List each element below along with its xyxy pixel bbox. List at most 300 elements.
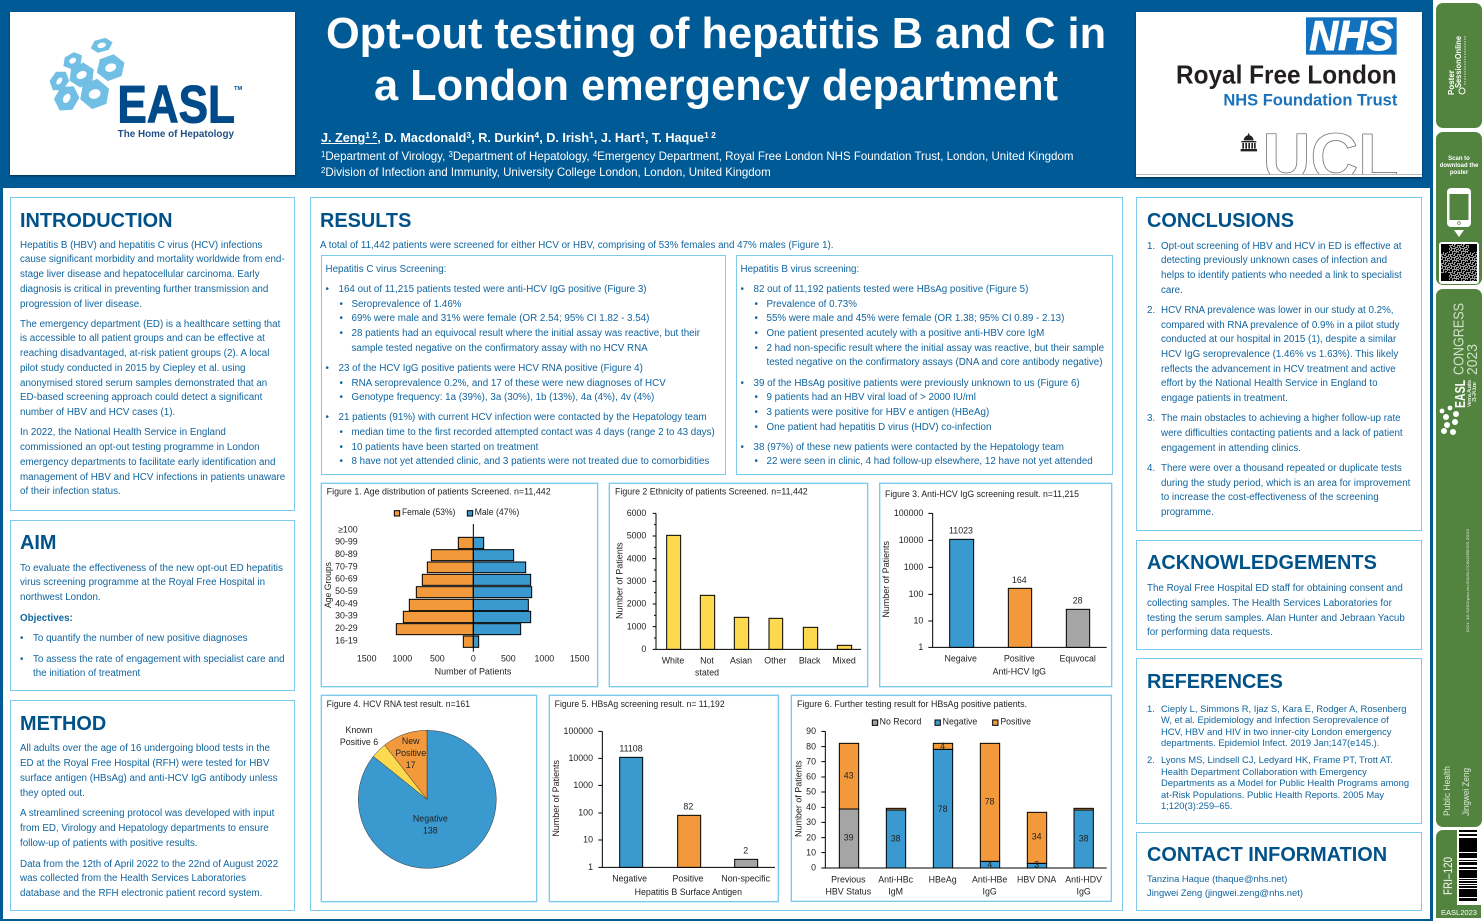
text: method paragraph 2: follow-up of patients with positive results. — [20, 838, 198, 849]
figure 2 bars — [667, 535, 852, 649]
figure 1 age labels: 40-49 — [335, 599, 358, 609]
conclusion 1: detecting previously unknown cases of infection and — [1161, 255, 1387, 266]
affiliations — [321, 150, 1073, 179]
figure 1 age labels: 16-19 — [335, 636, 358, 646]
block: EASL Congress 2023 — [1436, 289, 1482, 827]
text: introduction paragraph 3: In 2022, the National Health Service in England — [20, 427, 226, 438]
logo: EASL — [10, 12, 295, 175]
figure 3 value labels: 164 — [1012, 575, 1027, 585]
figure 4 pie slices — [358, 730, 496, 868]
logo: EASL: The Home of Hepatology — [118, 129, 234, 140]
text: aim statement: virus screening programme at the Royal Free Hospital in — [20, 577, 265, 588]
text: acknowledgements: for performing data requests. — [1147, 627, 1273, 638]
list: HCV RNA results: 23 of the HCV IgG positive patients were HCV RNA positive (Figure 4) — [338, 363, 643, 374]
text: introduction paragraph 1 — [20, 240, 285, 310]
figure 6 tick labels: 90 — [806, 726, 816, 736]
figure 2 tick labels: 6000 — [627, 508, 646, 518]
conclusion 2: HCV RNA prevalence was lower in our study at 0.2%, — [1161, 305, 1394, 316]
figure 3 value labels: 28 — [1073, 596, 1083, 606]
list: HBsAg results: 55% were male and 45% were female (OR 1.38; 95% CI 0.89 - 2.13) — [766, 313, 1064, 324]
figure 2 tick labels: 1000 — [627, 621, 646, 631]
figure 6 tick labels: 0 — [811, 863, 816, 873]
text: results summary: A total of 11,442 patients were screened for either HCV or HBV, comprising of 53% females and 47% males (Figure 1). — [320, 240, 834, 251]
logo: NHS Royal Free London and UCL — [1136, 12, 1422, 177]
figure 1 legend — [394, 507, 519, 517]
figure 1 age labels: 60-69 — [335, 574, 358, 584]
figure 4 slice labels: New — [402, 736, 420, 746]
text: introduction paragraph 3: emergency departments to facilitate early identification and — [20, 457, 275, 468]
text: introduction paragraph 3: management of HBV and HCV infections in patients unaware — [20, 472, 285, 483]
figure 2 category labels: Asian — [730, 656, 752, 666]
reference 1: W, et al. Epidemiology and Infection Seroprevalence of — [1161, 714, 1389, 725]
block: EASL Congress 2023: Jingwei Zeng — [1461, 768, 1472, 816]
figure 6 tick labels: 60 — [806, 772, 816, 782]
list: anti-HCV results: 164 out of 11,215 patients tested were anti-HCV IgG positive (Figure 3) — [338, 284, 647, 295]
heading: aim: AIM — [20, 532, 56, 554]
list: HCV follow-up: 21 patients (91%) with current HCV infection were contacted by the Hepatology team — [338, 412, 707, 423]
block: EASL Congress 2023: Public Health — [1442, 766, 1453, 816]
list: HBsAg results: 2 had non-specific result where the initial assay was reactive, but their sample — [766, 343, 1104, 354]
block: EASL Congress 2023: 2023 — [1464, 344, 1481, 375]
list: HBsAg results: Prevalence of 0.73% — [766, 299, 857, 310]
figure 3 category labels — [944, 654, 1096, 677]
conclusion 2 — [1147, 305, 1400, 404]
figure 3 tick labels: 10 — [914, 616, 923, 626]
panel: hepatitis C screening — [320, 254, 726, 474]
conclusion 3: The main obstacles to achieving a higher follow-up rate — [1161, 413, 1401, 424]
text: introduction paragraph 2: reaching disadvantaged, at-risk patient groups (2). A local — [20, 348, 269, 359]
panel: introduction — [10, 197, 295, 511]
chart: figure 2 ethnicity — [608, 482, 868, 688]
text: introduction paragraph 2: ED-based screening approach could detect a significant — [20, 392, 262, 403]
reference 2: Lyons MS, Lindsell CJ, Ledyard HK, Frame PT, Trott AT. — [1161, 754, 1393, 765]
figure 2 category labels: Not — [700, 656, 714, 666]
text: acknowledgements: testing the serum samples. Alan Hunter and Jebraan Yacub — [1147, 612, 1405, 624]
figure 6 category labels: IgG — [1077, 887, 1091, 897]
chart: figure 5 HBsAg — [548, 694, 780, 902]
figure 3 tick labels: 1000 — [904, 562, 923, 572]
block: EASL Congress 2023: Vienna, Austria — [1467, 380, 1473, 407]
text: introduction paragraph 2: pilot study conducted in 2015 by Ciepley et al. using — [20, 363, 245, 374]
text: contact details — [1147, 872, 1303, 898]
title: Opt-out testing of hepatitis B and C in — [326, 10, 1106, 58]
figure 6 tick labels: 40 — [806, 802, 816, 812]
heading: acknowledgements: ACKNOWLEDGEMENTS — [1147, 552, 1377, 574]
figure 1 legend: Male (47%) — [475, 507, 519, 517]
list: new HBV patients: 9 patients had an HBV viral load of > 2000 IU/ml — [766, 392, 976, 403]
figure 5 category labels: Negative — [612, 874, 647, 884]
text: method paragraph 1: ED at the Royal Free Hospital (RFH) were tested for HBV — [20, 758, 269, 769]
text: method paragraph 1: surface antigen (HBsAg) and anti-HCV IgG antibody unless — [20, 773, 278, 784]
figure 4 slice labels: 17 — [406, 760, 416, 770]
figure 5 tick labels: 10 — [583, 835, 593, 845]
reference 2: Departments as a Model for Public Health Programs among — [1161, 777, 1409, 788]
title — [326, 10, 1106, 110]
figure 6 category labels: Anti-HBe — [972, 875, 1007, 885]
figure 3 tick labels: 1 — [918, 642, 923, 652]
figure 1 age labels — [335, 525, 358, 646]
panel: conclusions — [1136, 197, 1422, 531]
text: acknowledgements — [1147, 583, 1405, 638]
bullet: objective 2 — [20, 653, 294, 682]
list: HCV RNA results: Genotype frequency: 1a (39%), 3a (30%), 1b (13%), 4a (4%), 4v (4%) — [352, 392, 654, 403]
text: introduction paragraph 2: anonymised stored serum samples demonstrated that an — [20, 378, 267, 389]
subheading: hepatitis B: Hepatitis B virus screening: — [740, 264, 859, 274]
reference 2: 2. — [1147, 754, 1155, 765]
figure 1 x axis labels: 500 — [430, 654, 445, 664]
figure 1 age labels: 30-39 — [335, 611, 358, 621]
text: introduction paragraph 2: The emergency department (ED) is a healthcare setting that — [20, 319, 280, 330]
figure 6 value labels: 38 — [891, 834, 901, 844]
figure 1 age labels: 70-79 — [335, 562, 358, 572]
text: acknowledgements: collecting samples. The Health Services Laboratories for — [1147, 598, 1392, 609]
figure 6 value labels: 39 — [844, 833, 854, 843]
panel: results — [310, 197, 1123, 911]
icon: phone — [1447, 188, 1471, 237]
conclusion 3 — [1147, 413, 1403, 454]
heading: method: METHOD — [20, 713, 106, 735]
figure 5 title: Figure 5. HBsAg screening result. n= 11,192 — [555, 699, 725, 709]
figure 1 age labels: 90-99 — [335, 537, 358, 547]
figure 5 category labels: Positive — [673, 874, 704, 884]
figure 6 tick labels — [806, 726, 816, 873]
page frame — [0, 188, 1433, 921]
panel: contact information — [1136, 832, 1422, 911]
figure 2 category labels: stated — [695, 668, 719, 678]
list: HBV follow-up — [740, 442, 1093, 467]
figure 6 value labels: 4 — [987, 860, 992, 870]
list: new HBV patients — [740, 378, 1080, 433]
conclusion 2: conducted at our hospital in 2015 (1), despite a similar — [1161, 334, 1396, 345]
list: HBsAg results: tested negative on the confirmatory assays (DNA and core antibody negative) — [766, 357, 1103, 368]
block: FRI-120 with barcode: EASL2023 — [1441, 908, 1477, 917]
figure 1 age labels: 80-89 — [335, 549, 358, 559]
figure 5 value labels: 2 — [743, 846, 748, 856]
list: HCV follow-up: 8 have not yet attended clinic, and 3 patients were not treated due to comorbidities — [352, 456, 709, 467]
text: introduction paragraph 2: is accessible to all patient groups and can be effective at — [20, 333, 265, 344]
chart: figure 6 further HBV testing — [790, 694, 1112, 902]
figure 2 tick labels: 3000 — [627, 576, 646, 586]
figure 3 category labels: Anti-HCV IgG — [993, 667, 1046, 677]
figure 6 category labels: Previous — [831, 875, 866, 885]
figure 2 tick labels — [627, 508, 646, 654]
figure 3 tick labels: 10000 — [899, 535, 923, 545]
block: EASL Congress 2023: DOI: 10.3252/pso.eu.EASLCONGRESS.2023 — [1465, 529, 1470, 632]
figure 6 category labels: HBV Status — [826, 887, 872, 897]
figure 3 value labels: 11023 — [949, 526, 973, 536]
figure 6 y axis title: Number of Patients — [794, 760, 804, 837]
list: HBV follow-up: 38 (97%) of these new patients were contacted by the Hepatology team — [754, 442, 1064, 453]
text: method paragraph 2 — [20, 808, 274, 849]
figure 5 value labels — [619, 744, 748, 856]
figure 6 tick labels: 10 — [806, 847, 816, 857]
authors: J. Zeng1 2, D. Macdonald3, R. Durkin4, D. Irish1, J. Hart1, T. Haque1 2 — [321, 130, 716, 145]
chart: figure 1 age pyramid — [320, 482, 598, 688]
figure 3 bars — [950, 539, 1090, 647]
conclusion 2: 2. — [1147, 305, 1155, 316]
conclusion 2: compared with RNA prevalence of 0.9% in a pilot study — [1161, 320, 1400, 331]
conclusion 2: reflects the advancement in HCV treatment and active — [1161, 364, 1396, 375]
figure 6 tick labels: 30 — [806, 817, 816, 827]
panel: aim — [10, 520, 295, 691]
figure 1 x axis labels: 1000 — [393, 654, 412, 664]
figure 3 tick labels — [894, 508, 923, 652]
figure 5 axes — [598, 731, 775, 867]
text: method paragraph 1 — [20, 743, 278, 799]
logo: NHS Royal Free London and UCL: NHS — [1309, 12, 1394, 59]
bullet: objective 1: To quantify the number of new positive diagnoses — [33, 633, 248, 644]
conclusion 4: 4. — [1147, 463, 1155, 474]
text: introduction paragraph 1: cause significant morbidity and mortality worldwide from end- — [20, 254, 285, 265]
list: anti-HCV results: 69% were male and 31% were female (OR 2.54; 95% CI 1.82 - 3.54) — [352, 313, 649, 324]
panel: hepatitis B screening — [736, 254, 1112, 474]
figure 2 category labels: Mixed — [832, 656, 856, 666]
block: FRI-120 with barcode: FRI–120 — [1441, 857, 1455, 895]
chart: figure 4 HCV RNA pie — [320, 694, 538, 902]
reference 1: departments. Epidemiol Infect. 2019 Jan;147(e145.). — [1161, 737, 1379, 748]
text: introduction paragraph 2: number of HBV and HCV cases (1). — [20, 407, 175, 418]
block: Poster Session Online — [1436, 3, 1482, 128]
logo: NHS Royal Free London and UCL: NHS Foundation Trust — [1223, 91, 1398, 110]
figure 6 axes — [821, 731, 1107, 868]
list: HCV follow-up: 10 patients have been started on treatment — [352, 442, 538, 453]
text: objectives label: Objectives: — [20, 613, 73, 624]
block: scan to download: Scan to — [1448, 156, 1470, 162]
figure 6 title: Figure 6. Further testing result for HBsAg positive patients. — [797, 699, 1027, 709]
figure 6 category labels — [826, 875, 1102, 897]
text: method paragraph 1: they opted out. — [20, 788, 85, 799]
figure 6 legend: No Record — [880, 717, 921, 727]
figure 6 tick labels: 50 — [806, 787, 816, 797]
conclusion 4: during the study period, which is an area for improvement — [1161, 478, 1410, 488]
block: FRI-120 with barcode — [1436, 830, 1481, 918]
heading: results: RESULTS — [320, 210, 411, 232]
list: anti-HCV results: Seroprevalence of 1.46% — [352, 299, 462, 310]
text: introduction paragraph 2 — [20, 319, 280, 418]
title: a London emergency department — [374, 62, 1058, 110]
heading: contact information: CONTACT INFORMATION — [1147, 844, 1387, 866]
figure 6 category labels: IgG — [983, 887, 997, 897]
figure 1 age labels: 20-29 — [335, 623, 358, 633]
text: introduction paragraph 1: diagnosis is critical in preventing further transmission and — [20, 284, 268, 295]
figure 3 tick labels: 100 — [909, 589, 923, 599]
figure 1 legend: Female (53%) — [402, 507, 455, 517]
text: introduction paragraph 3: of their infection status. — [20, 486, 121, 497]
list: HCV follow-up — [326, 412, 715, 467]
conclusion 4: There were over a thousand repeated or duplicate tests — [1161, 463, 1402, 474]
logo: NHS Royal Free London and UCL: Royal Free London — [1176, 59, 1397, 89]
panel: references — [1136, 658, 1422, 824]
conclusion 4: programme. — [1161, 507, 1214, 518]
block: EASL Congress 2023: CONGRESS — [1452, 303, 1468, 375]
list: HBsAg results — [740, 284, 1104, 368]
heading: conclusions: CONCLUSIONS — [1147, 210, 1294, 232]
text: introduction paragraph 3: commissioned an opt-out testing programme in London — [20, 442, 260, 453]
figure 4 slice labels — [340, 725, 448, 836]
reference 2: Health Department Collaboration with Emergency — [1161, 766, 1367, 777]
figure 5 category labels — [612, 874, 771, 897]
figure 6 legend — [872, 717, 1031, 727]
reference 2: 1;120(3):259–65. — [1161, 800, 1232, 811]
figure 1 x axis labels — [357, 654, 590, 677]
figure 6 value labels: 34 — [1032, 832, 1042, 842]
figure 2 tick labels: 5000 — [627, 531, 646, 541]
list: new HBV patients: 3 patients were positive for HBV e antigen (HBeAg) — [766, 407, 989, 418]
conclusion 1: care. — [1161, 285, 1183, 296]
reference 1: 1. — [1147, 703, 1155, 714]
figure 3 axes — [928, 513, 1107, 647]
subheading: hepatitis C: Hepatitis C virus Screening: — [326, 264, 446, 274]
text: aim statement — [20, 563, 283, 603]
text: method paragraph 2: from ED, Virology and Hepatology departments to ensure — [20, 823, 269, 834]
block: scan to download — [1436, 132, 1482, 285]
text: method paragraph 3: was collected from the Health Services Laboratories — [20, 873, 246, 884]
conclusion 1: helps to identify patients who needed a link to specialist — [1161, 270, 1402, 281]
figure 6 value labels — [844, 741, 1089, 870]
block: scan to download: poster — [1450, 170, 1469, 176]
figure 2 axes — [653, 513, 861, 649]
figure 2 category labels: Other — [764, 656, 786, 666]
bullet: objective 2: the initiation of treatment — [33, 668, 140, 679]
panel: method — [10, 700, 295, 911]
figure 1 x axis labels: 0 — [471, 654, 476, 664]
figure 1 x axis labels: 1000 — [535, 654, 554, 664]
list: new HBV patients: 39 of the HBsAg positive patients were previously unknown to us (Figure 6) — [754, 378, 1080, 389]
list: new HBV patients: One patient had hepatitis D virus (HDV) co-infection — [766, 422, 991, 433]
figure 6 category labels: Anti-HBc — [878, 875, 914, 885]
figure 1 age labels: ≥100 — [338, 525, 358, 535]
figure 1 x axis labels: 1500 — [570, 654, 590, 664]
figure 6 value labels: 78 — [938, 804, 948, 814]
figure 3 category labels: Equvocal — [1060, 654, 1096, 664]
conclusion 1: Opt-out screening of HBV and HCV in ED is effective at — [1161, 241, 1402, 252]
conclusion 3: were difficulties contacting patients and a lack of patient — [1161, 428, 1403, 439]
figure 1 title: Figure 1. Age distribution of patients Screened. n=11,442 — [327, 487, 551, 497]
reference 1: Cieply L, Simmons R, Ijaz S, Kara E, Rodger A, Rosenberg — [1161, 703, 1406, 714]
figure 5 tick labels: 10000 — [568, 753, 593, 763]
text: method paragraph 2: A streamlined screening protocol was developed with input — [20, 808, 274, 819]
text: method paragraph 3: Data from the 12th of April 2022 to the 22nd of August 2022 — [20, 859, 278, 870]
figure 6 stacked bars — [839, 743, 1093, 868]
text: introduction paragraph 3 — [20, 427, 285, 497]
figure 4 slice labels: Negative — [413, 814, 448, 824]
figure 6 legend: Negative — [943, 717, 977, 727]
figure 2 tick labels: 2000 — [627, 599, 646, 609]
text: aim statement: northwest London. — [20, 592, 101, 603]
conclusion 2: HCV IgG seroprevalence (1.46% vs 1.63%). This likely — [1161, 349, 1398, 360]
list: HCV RNA results: RNA seroprevalence 0.2%, and 17 of these were new diagnoses of HCV — [352, 378, 666, 389]
figure 6 value labels: 4 — [940, 741, 945, 751]
list: HBV follow-up: 22 were seen in clinic, 4 had follow-up elsewhere, 12 have not yet attended — [766, 456, 1093, 467]
text: acknowledgements: The Royal Free Hospital ED staff for obtaining consent and — [1147, 583, 1403, 594]
reference 1 — [1147, 703, 1406, 748]
heading: references: REFERENCES — [1147, 671, 1283, 693]
figure 6 value labels: 3 — [1034, 860, 1039, 870]
figure 5 tick labels — [564, 726, 593, 872]
reference 2: at-Risk Populations. Public Health Reports. 2005 May — [1161, 789, 1384, 800]
figure 3 category labels: Negaive — [944, 654, 977, 664]
affiliations: 2Division of Infection and Immunity, University College London, London, United Kingdom — [321, 166, 771, 179]
figure 2 tick labels: 0 — [641, 644, 646, 654]
list: HCV RNA results — [326, 363, 666, 403]
text: method paragraph 3: database and the RFH electronic patient record system. — [20, 888, 262, 899]
logo: EASL: TM — [234, 86, 242, 92]
figure 1 y axis title: Age Groups — [323, 561, 333, 608]
figure 2 category labels: White — [662, 656, 684, 666]
figure 2 tick labels: 4000 — [627, 553, 646, 563]
reference 1: HCV, HBV and HIV in two inner-city London emergency — [1161, 726, 1392, 737]
text: aim statement: To evaluate the effectiveness of the new opt-out ED hepatitis — [20, 563, 283, 574]
conclusion 3: 3. — [1147, 413, 1155, 424]
list: anti-HCV results — [326, 284, 700, 354]
conclusion 4 — [1147, 463, 1410, 518]
figure 6 category labels: IgM — [888, 887, 903, 897]
sidebar: poster session — [1436, 3, 1482, 918]
block: EASL Congress 2023: EASL — [1452, 380, 1469, 408]
figure 5 value labels: 11108 — [619, 744, 643, 754]
figure 3 tick labels: 100000 — [894, 508, 923, 518]
figure 1 x axis labels: 500 — [501, 654, 516, 664]
list: anti-HCV results: sample tested negative on the confirmatory assay with no HCV RNA — [352, 343, 648, 354]
text: contact details: Jingwei Zeng (jingwei.zeng@nhs.net) — [1147, 887, 1303, 898]
figure 5 y axis title: Number of Patients — [551, 759, 561, 837]
conclusion 2: effort by the National Health Service in England to — [1161, 378, 1378, 389]
text: introduction paragraph 1: progression of liver disease. — [20, 299, 142, 310]
logo: EASL: EASL — [117, 76, 235, 135]
list: anti-HCV results: 28 patients had an equivocal result where the initial assay was reactive, but their — [352, 328, 700, 339]
text: contact details: Tanzina Haque (thaque@nhs.net) — [1147, 872, 1287, 884]
figure 5 tick labels: 100 — [578, 808, 593, 818]
figure 5 category labels: Non-specific — [721, 874, 771, 884]
figure 6 category labels: HBV DNA — [1017, 875, 1056, 885]
figure 2 category labels: Black — [799, 656, 821, 666]
chart: figure 3 anti-HCV IgG — [878, 482, 1112, 688]
bullet: objective 2: To assess the rate of engagement with specialist care and — [33, 654, 285, 665]
figure 6 tick labels: 20 — [806, 832, 816, 842]
affiliations: 1Department of Virology, 3Department of Hepatology, 4Emergency Department, Royal Free London NHS Foundation Trust, London, United Kingdom — [321, 150, 1073, 163]
figure 1 x axis labels: Number of Patients — [435, 667, 512, 677]
conclusion 1 — [1147, 241, 1402, 296]
figure 6 category labels: Anti-HDV — [1065, 875, 1102, 885]
text: introduction paragraph 1: stage liver disease and hepatocellular carcinoma. Early — [20, 269, 260, 280]
figure 5 bars — [620, 757, 758, 867]
figure 6 tick labels: 80 — [806, 741, 816, 751]
figure 1 male bars — [473, 537, 532, 647]
block: Poster Session Online: SessionOnline — [1453, 36, 1463, 88]
figure 5 tick labels: 1 — [588, 862, 593, 872]
list: HCV follow-up: median time to the first recorded attempted contact was 4 days (range 2 to 43 days) — [352, 427, 715, 438]
figure 3 y axis title: Number of Patients — [881, 540, 891, 618]
figure 6 value labels: 43 — [844, 771, 854, 781]
heading: introduction: INTRODUCTION — [20, 210, 172, 232]
text: introduction paragraph 1: Hepatitis B (HBV) and hepatitis C virus (HCV) infections — [20, 240, 262, 251]
figure 4 slice labels: 138 — [423, 826, 438, 836]
text: method paragraph 3 — [20, 859, 278, 899]
figure 2 title: Figure 2 Ethnicity of patients Screened. n=11,442 — [615, 487, 808, 497]
figure 3 title: Figure 3. Anti-HCV IgG screening result. n=11,215 — [885, 489, 1079, 499]
figure 1 age labels: 50-59 — [335, 586, 358, 596]
figure 4 title: Figure 4. HCV RNA test result. n=161 — [327, 699, 470, 709]
block: Poster Session Online: Poster — [1447, 70, 1456, 95]
panel: acknowledgements — [1136, 540, 1422, 650]
figure 1 female bars — [396, 537, 473, 647]
block: scan to download: download the — [1440, 163, 1479, 169]
figure 6 tick labels: 70 — [806, 756, 816, 766]
figure 4 slice labels: Known — [346, 725, 373, 735]
conclusion 1: 1. — [1147, 241, 1155, 252]
figure 5 category labels: Hepatitis B Surface Antigen — [635, 887, 742, 897]
conclusion 3: engagement in attending clinics. — [1161, 442, 1301, 454]
